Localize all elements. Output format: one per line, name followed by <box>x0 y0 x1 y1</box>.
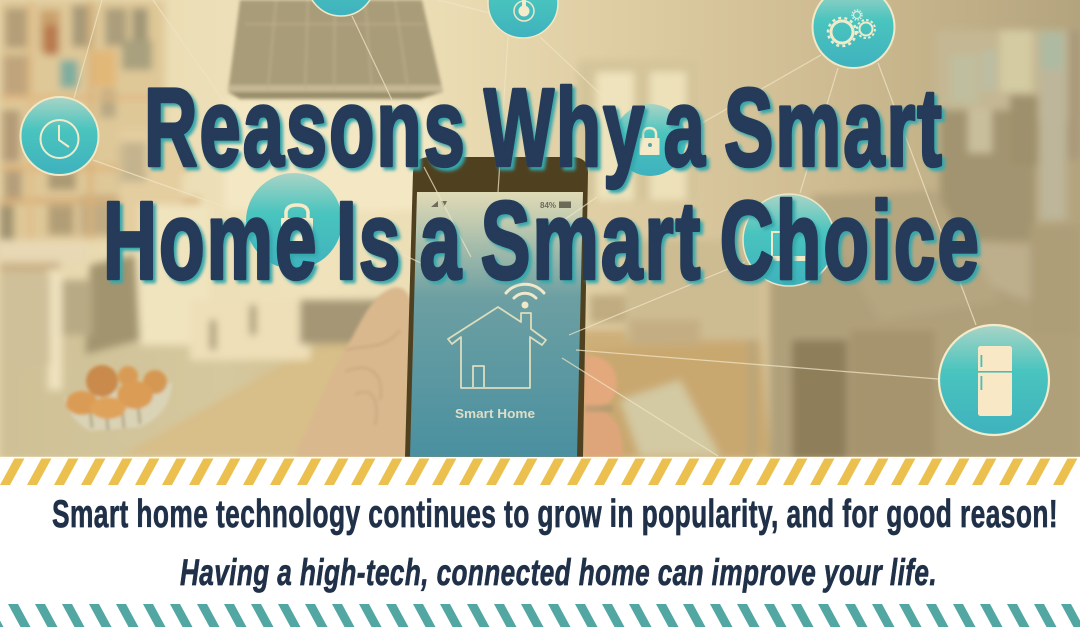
phone label: Smart Home <box>455 407 535 421</box>
icon circle: top hub <box>307 0 375 16</box>
icon: house outline <box>448 307 546 388</box>
lamp shade <box>228 0 443 99</box>
icon: wifi signal <box>506 284 544 308</box>
gold striped band <box>0 458 1080 485</box>
icon circle: laptop <box>743 194 835 286</box>
phone screen <box>410 192 583 457</box>
icon circle: small padlock <box>614 104 686 176</box>
icon circle: clock <box>20 97 98 175</box>
icon circle: gears <box>812 0 894 68</box>
title <box>103 66 981 302</box>
icon circle: refrigerator <box>939 325 1049 435</box>
smartphone <box>405 157 588 457</box>
teal striped band <box>0 604 1080 627</box>
icon circle: thermometer <box>488 0 558 38</box>
hero photo: blurred smart home interior <box>0 0 1080 460</box>
status bar: battery icon <box>559 202 571 208</box>
network connection lines <box>74 0 976 456</box>
status bar: signal <box>431 201 447 207</box>
icon circle: large padlock <box>246 173 342 269</box>
hand holding the phone <box>295 287 622 457</box>
status bar: battery level: 84% <box>540 201 556 210</box>
fruit bowl <box>64 365 172 431</box>
